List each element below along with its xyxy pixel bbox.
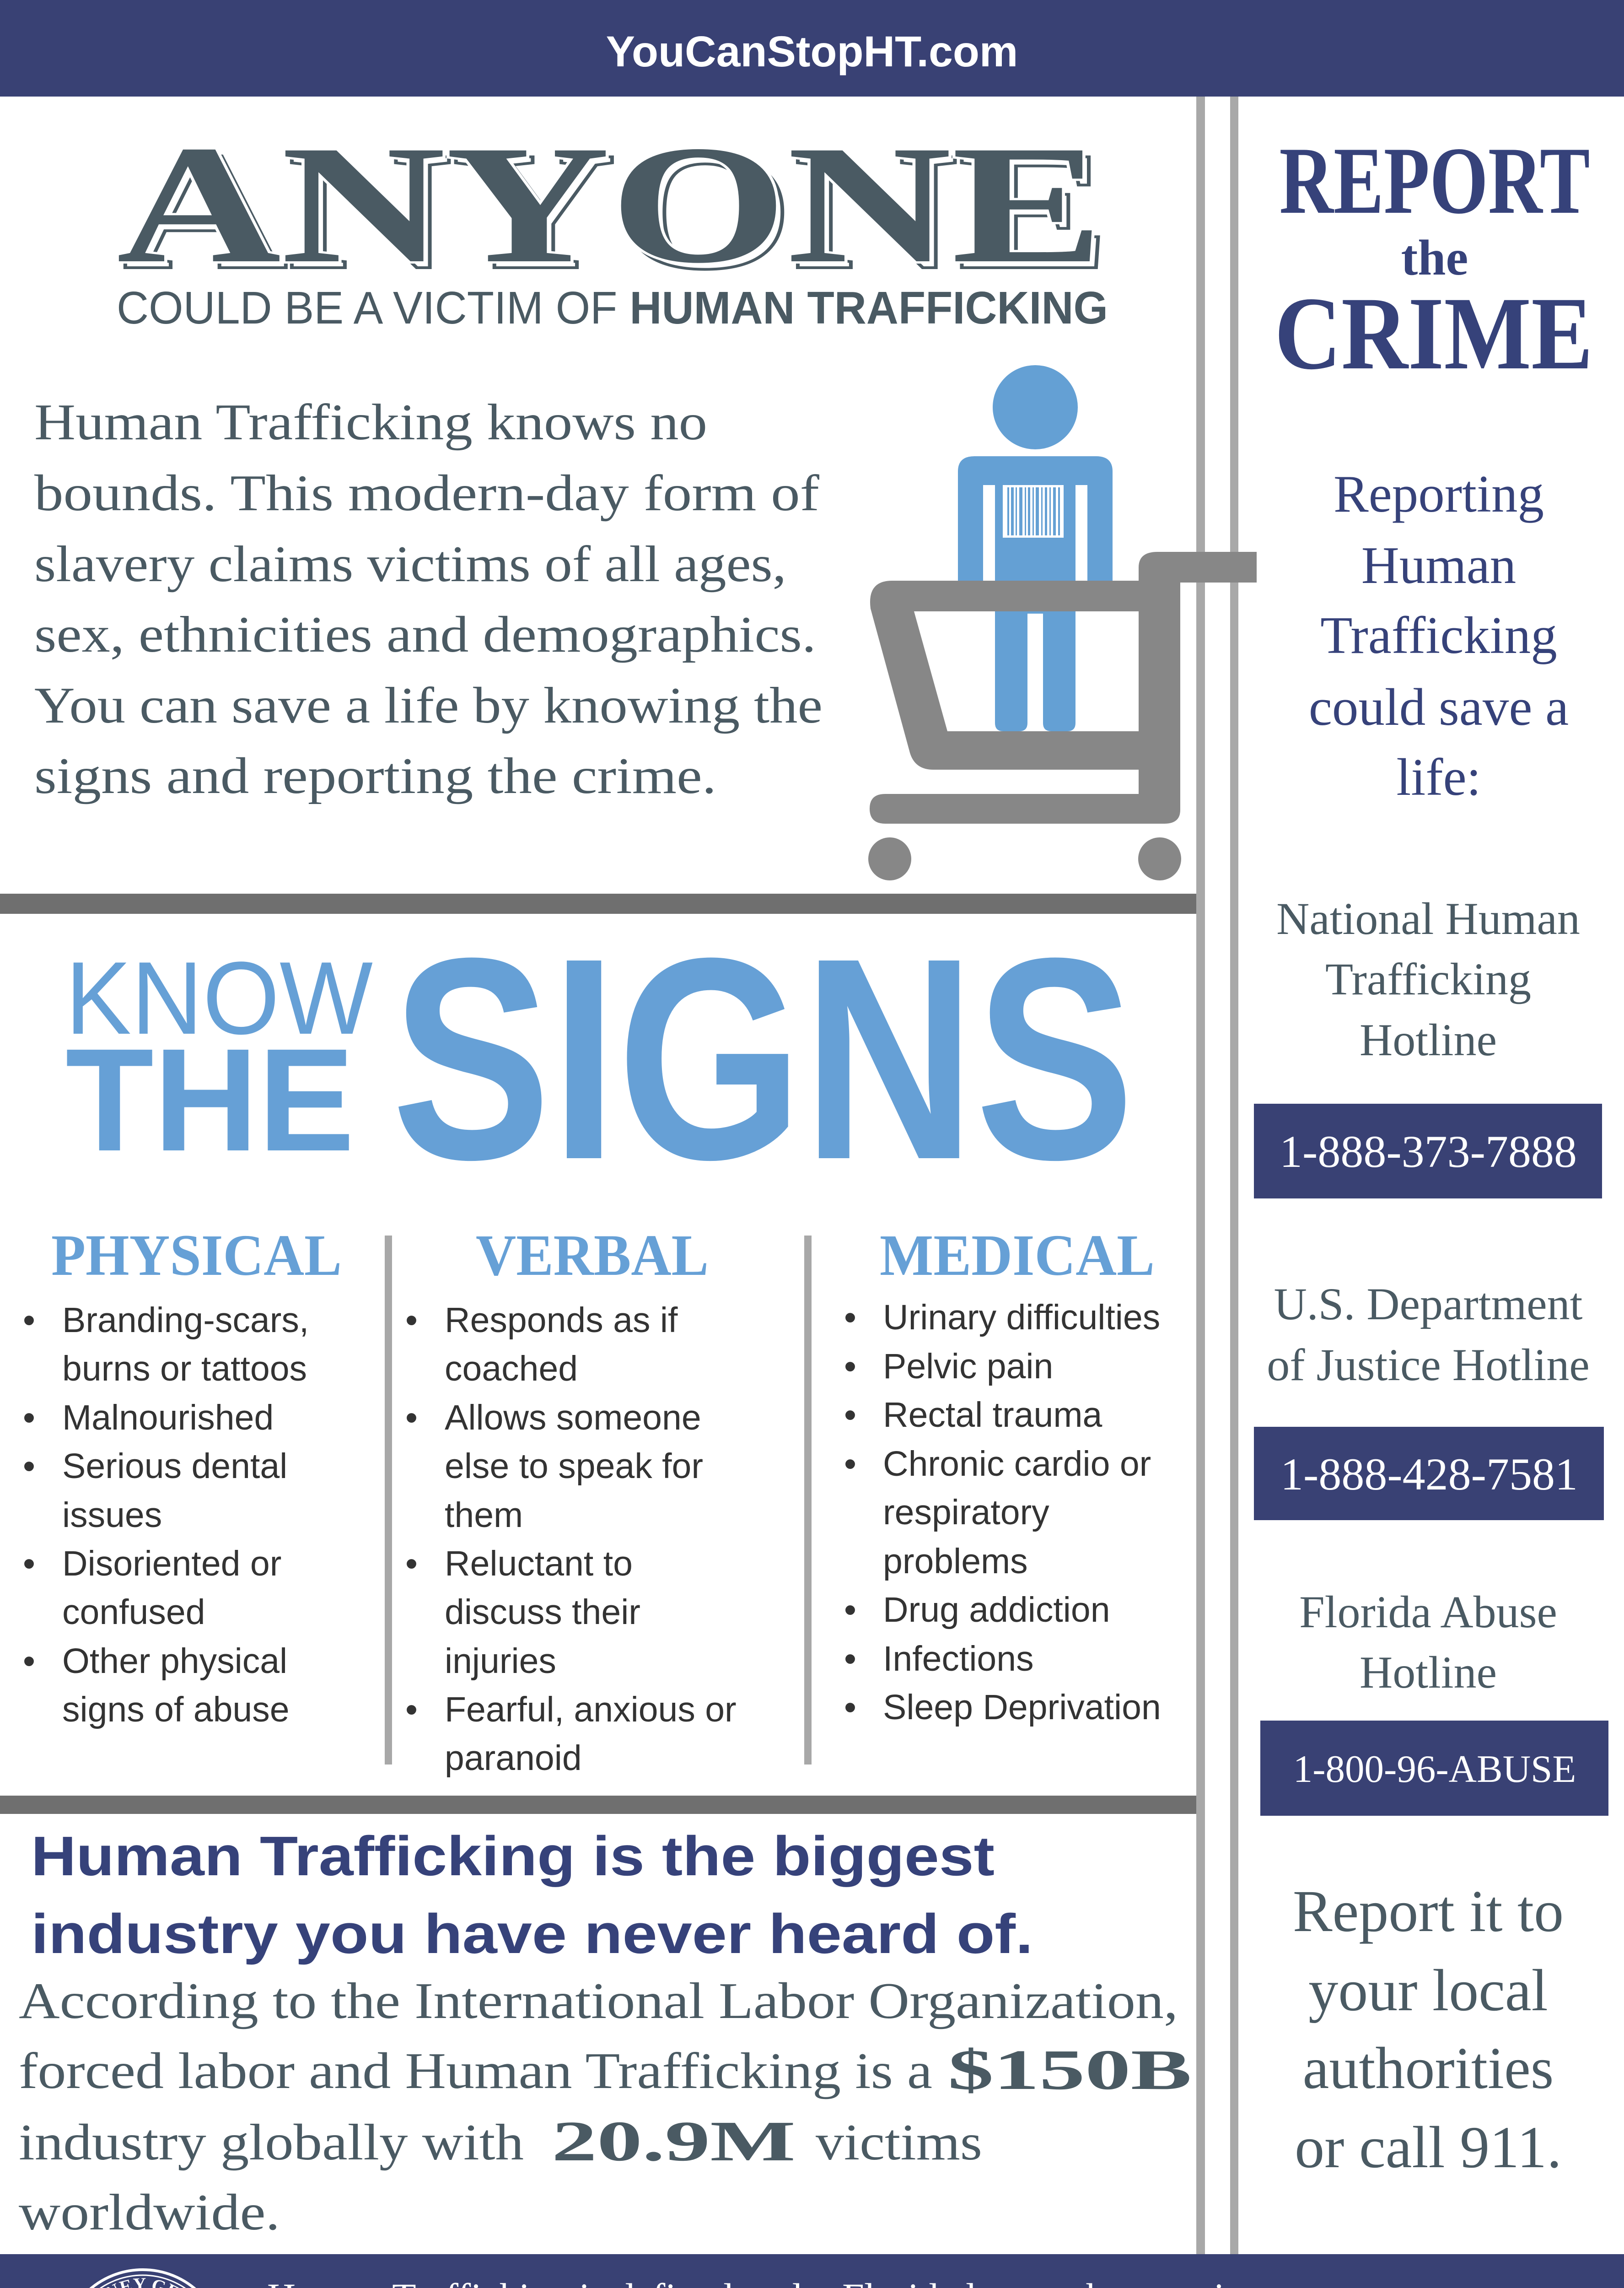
right panel: reporting text: Reporting <box>1334 465 1544 523</box>
list: physical signs: • <box>23 1300 35 1340</box>
column headers: PHYSICAL <box>51 1223 342 1288</box>
headline: biggest industry: industry you have never heard of. <box>31 1903 1033 1965</box>
right panel: report locally: or call 911. <box>1295 2115 1562 2180</box>
hotline: Florida abuse <box>1260 1586 1608 1816</box>
list: medical signs: Sleep Deprivation <box>883 1688 1161 1727</box>
list: verbal signs: coached <box>445 1349 578 1388</box>
intro paragraph <box>34 394 823 804</box>
list: medical signs: Drug addiction <box>883 1590 1110 1630</box>
statistics paragraph: forced labor and Human Trafficking is a <box>19 2043 932 2099</box>
right panel: report locally: authorities <box>1303 2035 1554 2101</box>
right panel: reporting text: Trafficking <box>1320 606 1557 664</box>
statistics paragraph: victims <box>816 2114 982 2171</box>
hotline: Florida abuse: 1-800-96-ABUSE <box>1293 1748 1576 1791</box>
heading: KNOW THE SIGNS: KNOW <box>65 940 373 1056</box>
right panel: reporting text: Human <box>1361 536 1516 594</box>
intro paragraph: signs and reporting the crime. <box>34 748 716 804</box>
list: physical signs: burns or tattoos <box>62 1349 307 1388</box>
statistics paragraph: $150B <box>948 2039 1192 2102</box>
column headers: MEDICAL <box>880 1223 1155 1288</box>
header bar: YouCanStopHT.com <box>606 27 1018 76</box>
list: verbal signs: injuries <box>445 1641 556 1681</box>
heading: KNOW THE SIGNS: THE <box>65 1018 355 1182</box>
intro paragraph: sex, ethnicities and demographics. <box>34 606 816 663</box>
list: medical signs: Pelvic pain <box>883 1347 1053 1386</box>
hotline: national: Hotline <box>1360 1014 1497 1065</box>
list: medical signs: Rectal trauma <box>883 1395 1102 1435</box>
intro paragraph: slavery claims victims of all ages, <box>34 536 786 593</box>
headline: biggest industry <box>31 1825 1033 1965</box>
list: verbal signs: • <box>405 1398 418 1437</box>
statistics paragraph: worldwide. <box>19 2184 280 2241</box>
hotline: national: 1-888-373-7888 <box>1280 1126 1577 1177</box>
list: physical signs: Serious dental <box>62 1446 287 1486</box>
list: physical signs: signs of abuse <box>62 1690 290 1729</box>
statistics paragraph: 20.9M <box>552 2110 796 2173</box>
list: physical signs: issues <box>62 1495 162 1535</box>
title: ANYONE: ANYONE <box>123 117 1110 305</box>
right panel: report the crime title: CRIME <box>1274 276 1593 391</box>
list: verbal signs: • <box>405 1544 418 1583</box>
list: medical signs: • <box>844 1688 856 1727</box>
heading: KNOW THE SIGNS: SIGNS <box>392 898 1135 1220</box>
column headers <box>51 1223 1155 1288</box>
list: verbal signs: discuss their <box>445 1592 640 1632</box>
list: medical signs: Chronic cardio or <box>883 1444 1151 1484</box>
heading: KNOW THE SIGNS <box>65 898 1135 1220</box>
hotline: Florida abuse: Florida Abuse <box>1299 1586 1557 1637</box>
title: ANYONE: ANYONE <box>117 111 1103 298</box>
list: verbal signs: Responds as if <box>445 1300 678 1340</box>
hotline: Florida abuse: Hotline <box>1360 1647 1497 1698</box>
hotline: DOJ <box>1254 1279 1604 1520</box>
right panel: report the crime title: the <box>1401 230 1468 286</box>
list: medical signs: problems <box>883 1542 1028 1581</box>
list: physical signs: Branding-scars, <box>62 1300 309 1340</box>
list: physical signs: • <box>23 1398 35 1437</box>
list: verbal signs: Allows someone <box>445 1398 701 1437</box>
list: verbal signs <box>405 1300 737 1778</box>
icon: attorney general seal <box>62 2270 224 2288</box>
list: physical signs: Disoriented or <box>62 1544 281 1583</box>
list: verbal signs: paranoid <box>445 1738 582 1778</box>
right panel: reporting text: life: <box>1396 748 1481 806</box>
list: medical signs: respiratory <box>883 1493 1049 1532</box>
header bar <box>0 0 1624 97</box>
right panel: reporting text: could save a <box>1309 678 1569 736</box>
list: verbal signs: • <box>405 1690 418 1729</box>
list: verbal signs: them <box>445 1495 523 1535</box>
list: medical signs: • <box>844 1347 856 1386</box>
list: medical signs: Infections <box>883 1639 1034 1678</box>
intro paragraph: bounds. This modern-day form of <box>34 465 820 522</box>
list: verbal signs: Fearful, anxious or <box>445 1690 737 1729</box>
footer <box>0 2254 1624 2288</box>
list: verbal signs: Reluctant to <box>445 1544 633 1583</box>
intro paragraph: Human Trafficking knows no <box>34 394 707 451</box>
hotline: national <box>1254 893 1602 1198</box>
list: medical signs: • <box>844 1395 856 1435</box>
right panel: reporting text <box>1309 465 1569 806</box>
statistics paragraph: According to the International Labor Organization, <box>19 1973 1178 2029</box>
icon: person in shopping cart <box>868 365 1257 880</box>
hotline: DOJ: of Justice Hotline <box>1267 1339 1590 1390</box>
hotline: national: Trafficking <box>1325 954 1531 1004</box>
list: medical signs <box>844 1298 1161 1727</box>
list: physical signs <box>23 1300 309 1729</box>
list: physical signs: • <box>23 1641 35 1681</box>
headline: biggest industry: Human Trafficking is the biggest <box>31 1825 995 1887</box>
right panel: report locally: Report it to <box>1293 1878 1564 1944</box>
list: medical signs: • <box>844 1444 856 1484</box>
intro paragraph: You can save a life by knowing the <box>34 677 823 734</box>
list: medical signs: • <box>844 1298 856 1337</box>
statistics paragraph: industry globally with <box>19 2114 524 2171</box>
list: physical signs: • <box>23 1544 35 1583</box>
hotline: DOJ: 1-888-428-7581 <box>1280 1449 1578 1500</box>
right panel: report locally: your local <box>1308 1958 1548 2024</box>
list: medical signs: Urinary difficulties <box>883 1298 1160 1337</box>
list: verbal signs: else to speak for <box>445 1446 703 1486</box>
list: physical signs: • <box>23 1446 35 1486</box>
list: physical signs: Malnourished <box>62 1398 274 1437</box>
statistics paragraph <box>19 1973 1192 2241</box>
list: medical signs: • <box>844 1639 856 1678</box>
column headers: VERBAL <box>476 1223 709 1288</box>
list: physical signs: confused <box>62 1592 205 1632</box>
right panel: report locally <box>1293 1878 1564 2180</box>
list: verbal signs: • <box>405 1300 418 1340</box>
list: medical signs: • <box>844 1590 856 1630</box>
subtitle: COULD BE A VICTIM OF HUMAN TRAFFICKING <box>117 282 1108 334</box>
right panel: report the crime title <box>1274 128 1593 391</box>
hotline: DOJ: U.S. Department <box>1274 1279 1583 1329</box>
list: physical signs: Other physical <box>62 1641 287 1681</box>
hotline: national: National Human <box>1276 893 1580 944</box>
